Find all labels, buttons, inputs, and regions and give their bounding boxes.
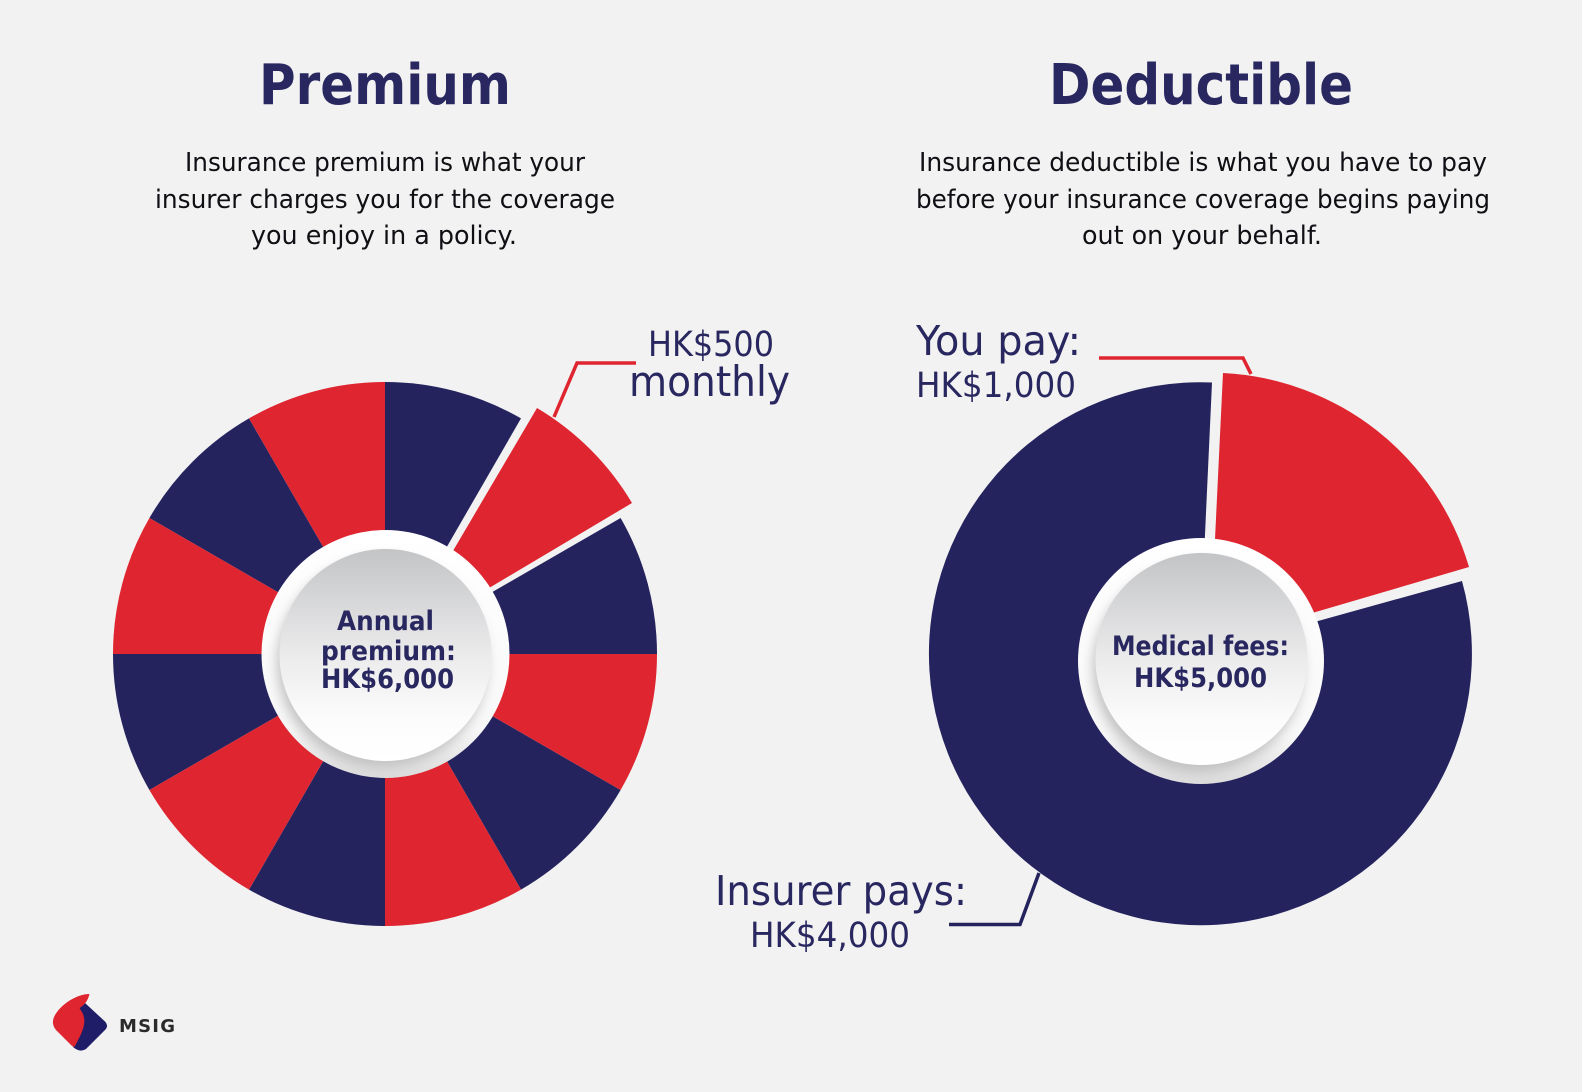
title: Deductible: Deductible xyxy=(1049,53,1353,118)
text block: premium description xyxy=(155,148,615,251)
text: medical fees: Medical fees: xyxy=(1112,631,1289,662)
chart: deductible pie xyxy=(929,373,1472,925)
slices: red xyxy=(113,382,657,926)
centre disc: medical fees xyxy=(1078,538,1324,784)
icon: MSIG mark xyxy=(53,994,107,1051)
label: insurer pays xyxy=(715,867,967,956)
label: you pay: HK$1,000 xyxy=(916,366,1076,406)
wordmark: MSIG xyxy=(119,1016,175,1037)
label: insurer pays: HK$4,000 xyxy=(750,916,910,956)
text: medical fees: HK$5,000 xyxy=(1134,663,1267,694)
logo: MSIG xyxy=(53,994,175,1051)
text: annual premium: premium: xyxy=(321,636,456,667)
label: insurer pays: Insurer pays: xyxy=(715,867,967,915)
text: medical fees xyxy=(1112,631,1289,694)
callout line: HK$500 monthly xyxy=(554,363,636,417)
text block: premium description: Insurance premium is what your xyxy=(185,148,585,178)
text: annual premium xyxy=(321,606,456,695)
text: annual premium: HK$6,000 xyxy=(321,664,454,695)
callout line: insurer pays xyxy=(949,873,1039,924)
label: you pay: You pay: xyxy=(915,317,1081,365)
text block: premium description: you enjoy in a policy. xyxy=(251,221,517,251)
slices: navy xyxy=(113,382,657,926)
slice: you pay xyxy=(1210,373,1469,643)
slice: insurer pays xyxy=(929,382,1472,925)
label: HK$500 monthly: HK$500 xyxy=(648,325,774,365)
text block: deductible description: out on your behalf. xyxy=(1082,221,1322,251)
title: Premium: Premium xyxy=(259,53,511,118)
centre disc: annual premium xyxy=(262,530,510,778)
text block: deductible description: before your insurance coverage begins paying xyxy=(916,185,1490,215)
label: HK$500 monthly xyxy=(629,325,790,406)
label: you pay xyxy=(915,317,1081,406)
text block: deductible description xyxy=(916,148,1490,251)
slice: exploded monthly slice xyxy=(400,408,632,641)
chart: premium pie xyxy=(113,382,657,926)
callout line: you pay xyxy=(1099,358,1251,374)
text: annual premium: Annual xyxy=(337,606,434,637)
text block: premium description: insurer charges you for the coverage xyxy=(155,185,615,215)
label: HK$500 monthly: monthly xyxy=(629,357,790,406)
text block: deductible description: Insurance deductible is what you have to pay xyxy=(919,148,1487,178)
